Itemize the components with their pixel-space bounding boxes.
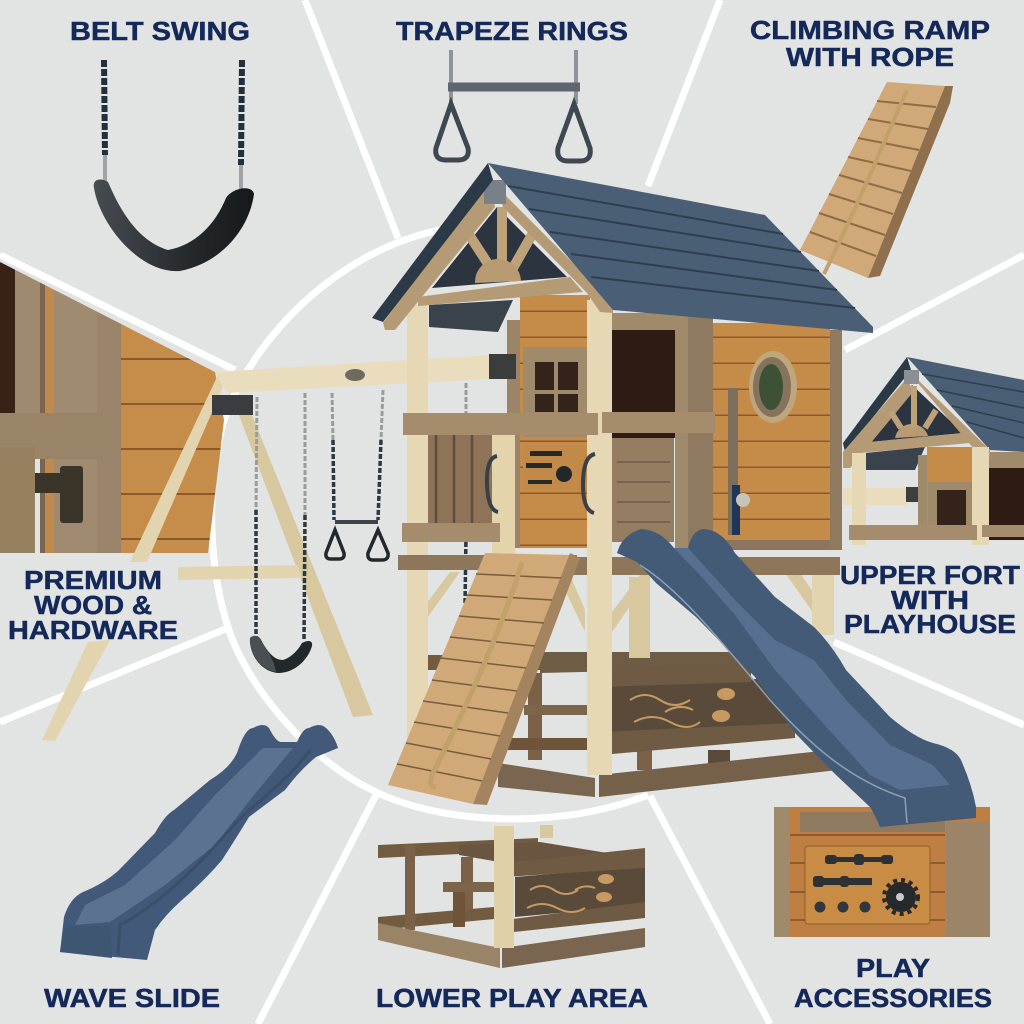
icon: belt swing <box>94 60 254 271</box>
panel: upper fort with playhouse <box>843 357 1024 545</box>
heading: play accessories: ACCESSORIES <box>794 983 992 1013</box>
heading: premium wood and hardware: HARDWARE <box>8 615 178 645</box>
heading: lower play area: LOWER PLAY AREA <box>376 983 648 1013</box>
icon: climbing ramp with rope <box>800 82 953 278</box>
heading: wave slide: WAVE SLIDE <box>44 983 220 1013</box>
lower play area <box>427 652 838 797</box>
icon: trapeze rings <box>436 50 590 161</box>
gable and roof <box>372 163 873 333</box>
swing frame <box>42 354 507 741</box>
panel: play accessories <box>774 807 990 937</box>
swing chains and seat <box>250 393 312 673</box>
heading: premium wood and hardware: WOOD & <box>34 590 152 620</box>
house walls <box>420 295 842 552</box>
main slide <box>617 529 976 827</box>
panel: activity board <box>523 445 587 490</box>
telescope <box>728 388 750 535</box>
heading: upper fort with playhouse: WITH <box>891 585 969 615</box>
panel: wave slide <box>60 725 338 960</box>
illustration: main playset <box>42 163 976 827</box>
heading: upper fort with playhouse <box>840 560 1020 639</box>
heading: premium wood and hardware <box>8 565 178 645</box>
heading: play accessories: PLAY <box>856 953 930 983</box>
handles <box>487 454 595 513</box>
heading: belt swing: BELT SWING <box>70 16 250 46</box>
railings and posts <box>398 300 840 775</box>
front climbing ramp <box>388 553 580 805</box>
heading: climbing ramp with rope <box>750 15 990 72</box>
heading: upper fort with playhouse: UPPER FORT <box>840 560 1020 590</box>
under eave shadow <box>429 300 513 332</box>
panel: lower play area <box>378 825 645 968</box>
heading: trapeze rings: TRAPEZE RINGS <box>396 16 628 46</box>
porthole window <box>749 351 797 423</box>
trapeze chains and rings <box>326 383 466 605</box>
panel: premium wood and hardware <box>0 262 230 553</box>
heading: climbing ramp with rope: WITH ROPE <box>786 42 954 72</box>
heading: climbing ramp with rope: CLIMBING RAMP <box>750 15 990 45</box>
heading: play accessories <box>794 953 992 1013</box>
heading: upper fort with playhouse: PLAYHOUSE <box>844 609 1016 639</box>
heading: premium wood and hardware: PREMIUM <box>24 565 162 595</box>
